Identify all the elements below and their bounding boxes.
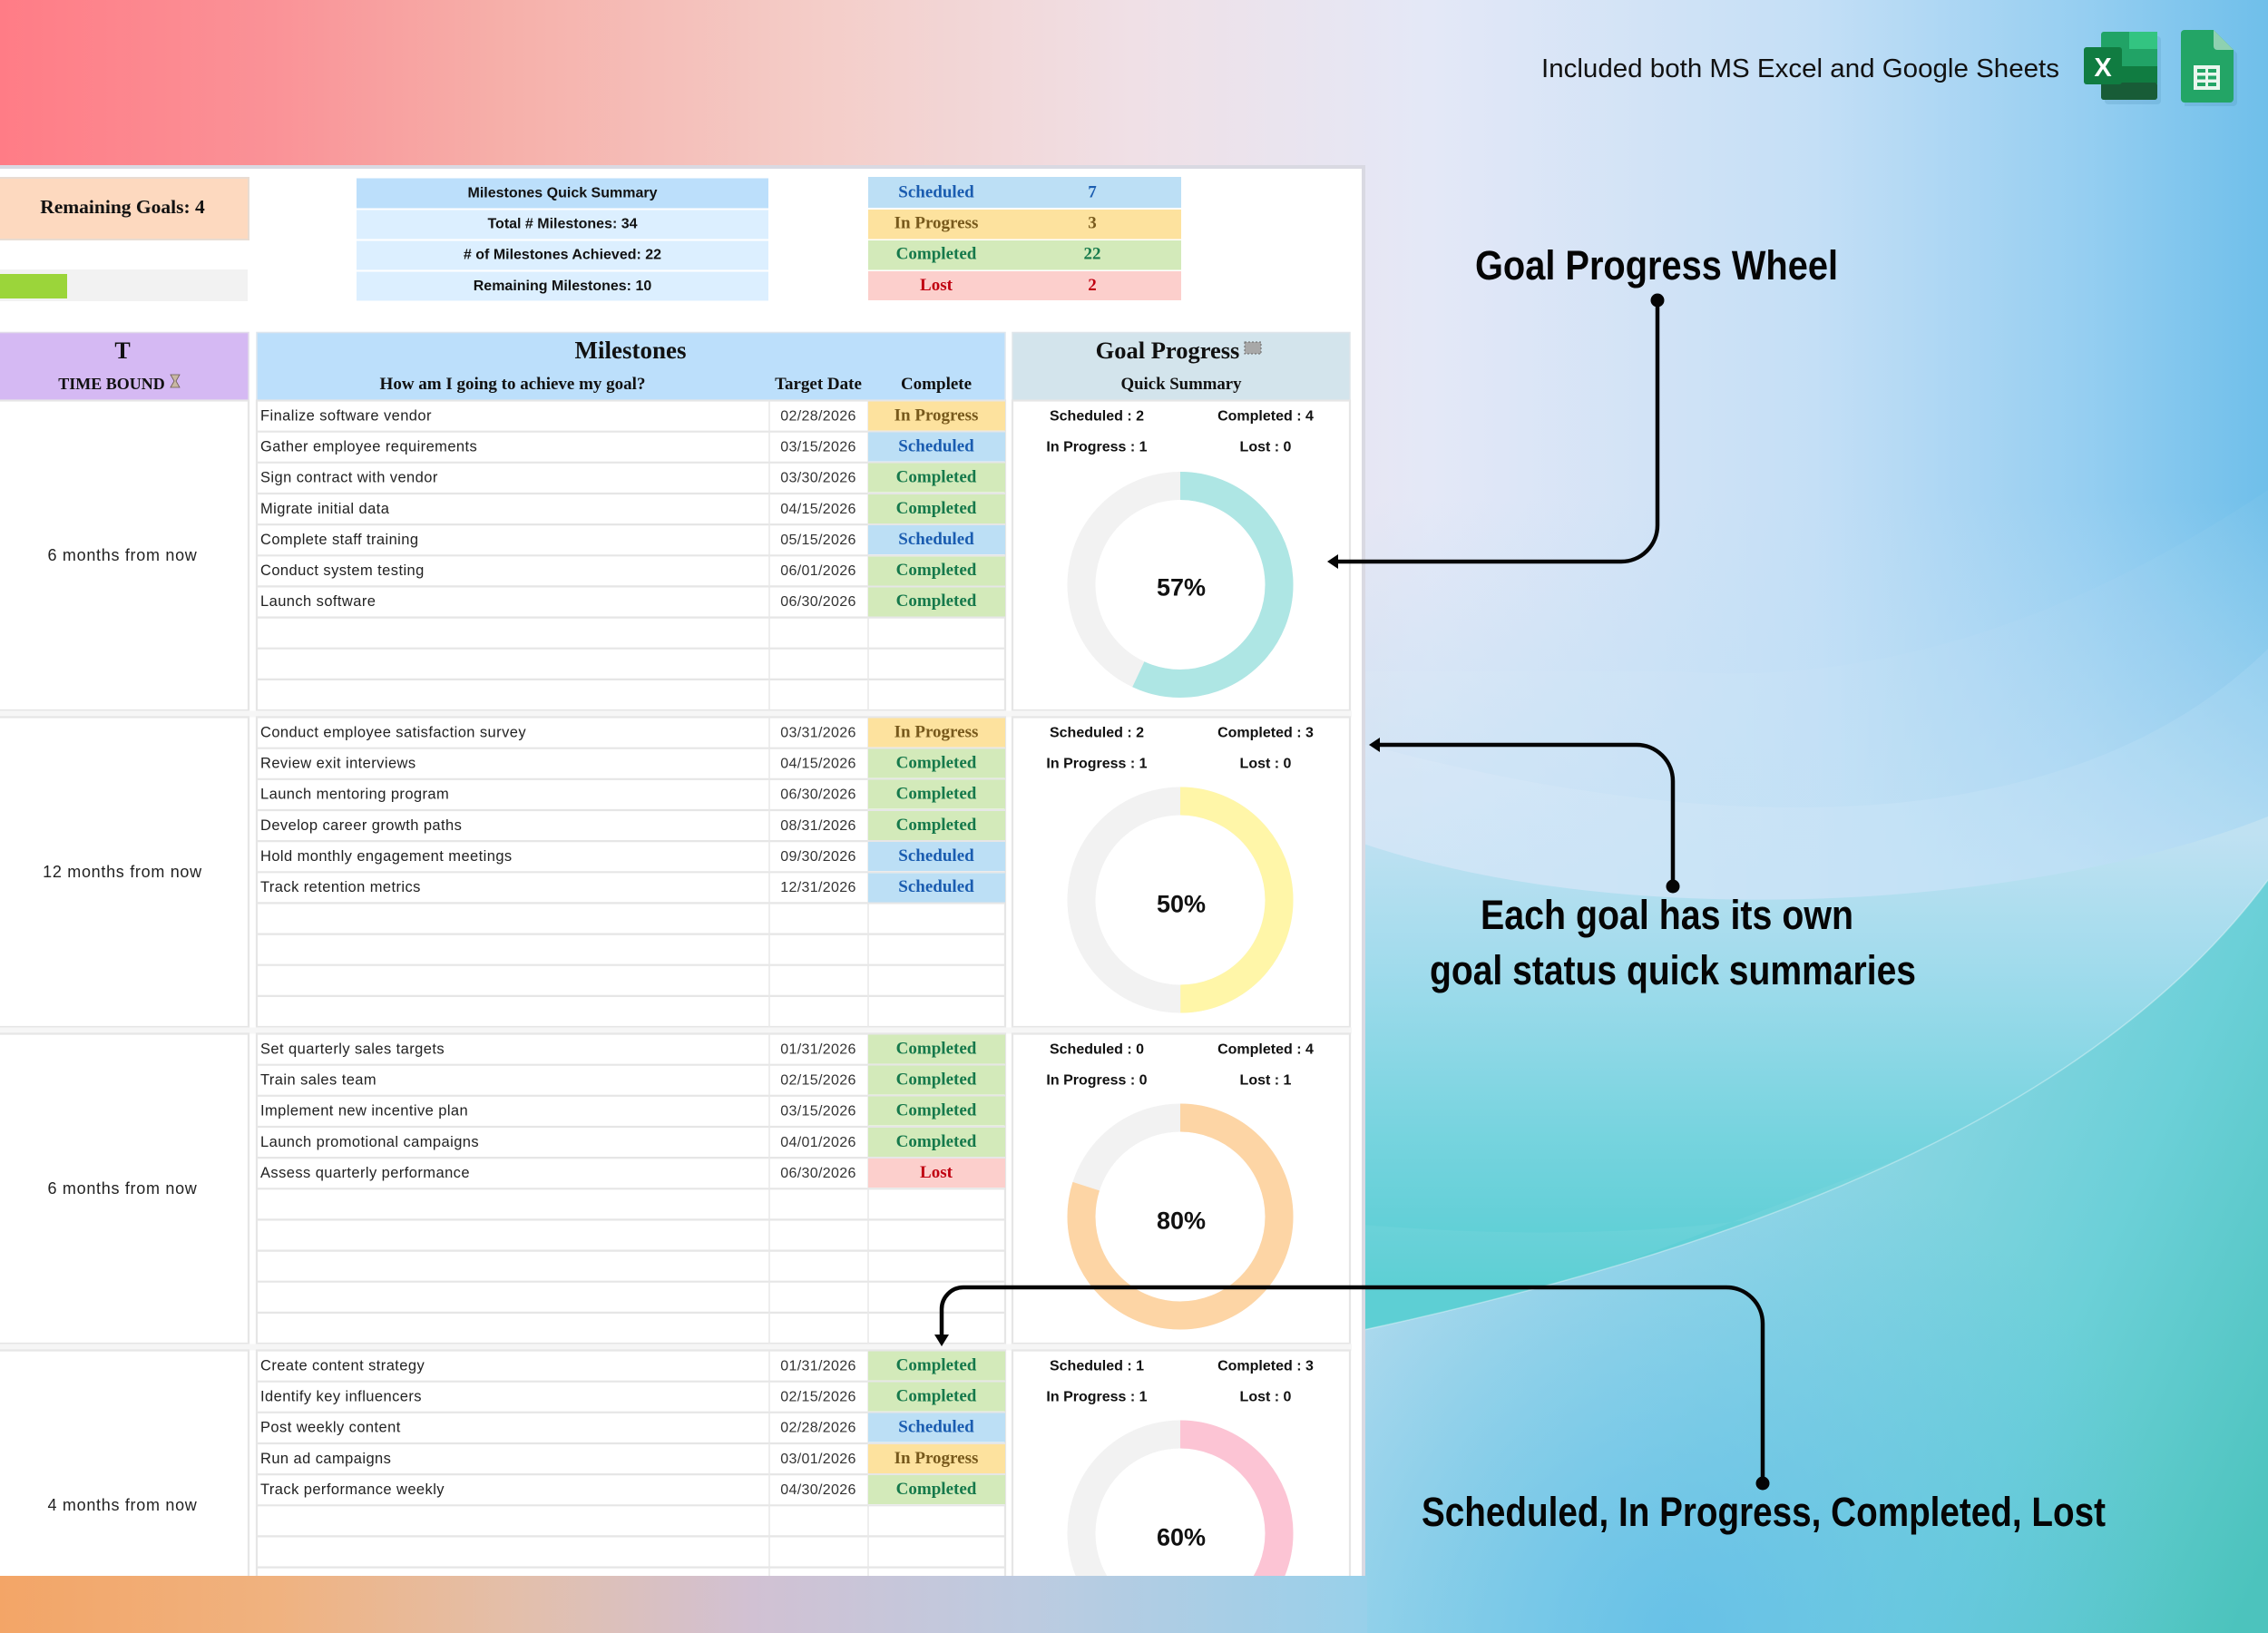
- milestone row: [260, 780, 1005, 809]
- milestone row: [260, 494, 1005, 523]
- goal status summary: Scheduled : 0: [1050, 1041, 1144, 1057]
- milestone row: Review exit interviews: [260, 755, 416, 771]
- milestone row: [260, 1413, 1005, 1442]
- milestone row: Completed: [896, 785, 977, 804]
- milestone row: Train sales team: [260, 1072, 376, 1089]
- milestone row: Completed: [896, 1039, 977, 1058]
- icon: excel: X: [2094, 54, 2112, 83]
- milestone row: Develop career growth paths: [260, 817, 462, 834]
- status totals: Completed: [896, 245, 977, 263]
- milestone row: [260, 432, 1005, 461]
- milestone row: [260, 463, 1005, 492]
- time frame: 12 months from now: [43, 863, 202, 881]
- time frame: 6 months from now: [48, 546, 198, 564]
- milestone row: Completed: [896, 1071, 977, 1089]
- milestone row: 03/30/2026: [780, 471, 856, 486]
- goal status summary: In Progress : 1: [1046, 439, 1148, 455]
- milestone row: Completed: [896, 753, 977, 773]
- milestone row: [260, 401, 1005, 430]
- milestone row: 04/01/2026: [780, 1135, 856, 1150]
- goal status summary: [1046, 1358, 1314, 1404]
- status totals: Scheduled: [898, 183, 974, 201]
- header: goal progress: Goal Progress: [1096, 337, 1239, 364]
- arrow: statuses: [934, 1287, 1769, 1490]
- milestone row: [260, 719, 1005, 748]
- caption: goal progress wheel: Goal Progress Wheel: [1475, 242, 1838, 288]
- milestone row: 03/31/2026: [780, 725, 856, 740]
- milestone row: 04/30/2026: [780, 1482, 856, 1498]
- milestone row: Launch software: [260, 593, 376, 610]
- milestone row: 08/31/2026: [780, 818, 856, 834]
- milestone row: 02/15/2026: [780, 1072, 856, 1089]
- milestone row: 04/15/2026: [780, 757, 856, 771]
- milestone row: Sign contract with vendor: [260, 470, 438, 486]
- milestone row: 06/01/2026: [780, 563, 856, 579]
- progress bar: [0, 269, 248, 301]
- header: goal progress: [1012, 332, 1350, 401]
- icon: google sheets: [2181, 30, 2237, 106]
- milestone row: Identify key influencers: [260, 1388, 422, 1404]
- goal progress wheel 57%: 57%: [1157, 573, 1206, 601]
- goal status summary: Completed : 4: [1217, 408, 1314, 424]
- bottom gradient strip: [0, 1576, 1367, 1633]
- header: milestones: Complete: [901, 375, 972, 394]
- header: milestones: How am I going to achieve my goal?: [380, 375, 645, 394]
- milestone row: Completed: [896, 816, 977, 835]
- milestone row: Launch mentoring program: [260, 787, 449, 803]
- milestone row: Completed: [896, 561, 977, 580]
- icon: hourglass: [171, 375, 180, 387]
- milestone row: Complete staff training: [260, 532, 418, 548]
- goal status summary: [1046, 725, 1314, 771]
- caption: quick summaries: Each goal has its own: [1481, 892, 1853, 938]
- milestones quick summary: Milestones Quick Summary: [468, 185, 658, 201]
- milestone row: Set quarterly sales targets: [260, 1041, 445, 1057]
- header: milestones: Target Date: [775, 375, 862, 394]
- icon: excel: [2084, 32, 2161, 104]
- milestones quick summary: Remaining Milestones: 10: [474, 279, 651, 294]
- goal progress wheel 60%: [1081, 1434, 1279, 1632]
- milestone row: Post weekly content: [260, 1420, 401, 1436]
- caption: quick summaries: goal status quick summaries: [1430, 947, 1916, 993]
- milestone row: Assess quarterly performance: [260, 1165, 470, 1181]
- status totals: Lost: [920, 276, 953, 295]
- time frame: 4 months from now: [48, 1496, 198, 1514]
- milestone row: [260, 842, 1005, 871]
- arrow: quick summaries: [1369, 738, 1680, 893]
- goal progress wheel 80%: 80%: [1157, 1207, 1206, 1234]
- milestone row: Gather employee requirements: [260, 439, 477, 455]
- time frame: 6 months from now: [48, 1179, 198, 1198]
- milestone row: Scheduled: [898, 1418, 974, 1437]
- milestone row: Hold monthly engagement meetings: [260, 848, 513, 865]
- milestone row: [260, 1444, 1005, 1473]
- header: time bound: T: [114, 337, 131, 364]
- caption: quick summaries: [1430, 892, 1916, 993]
- goal block 3: [0, 1027, 1352, 1344]
- milestone row: Lost: [920, 1163, 953, 1182]
- goal status summary: In Progress : 0: [1046, 1072, 1148, 1089]
- milestone row: Track retention metrics: [260, 879, 421, 895]
- header: milestones: [257, 332, 1005, 401]
- goal progress wheel 50%: [1081, 801, 1279, 999]
- milestone row: 02/28/2026: [780, 408, 856, 424]
- milestone row: Conduct employee satisfaction survey: [260, 724, 526, 740]
- milestone row: 12/31/2026: [780, 880, 856, 895]
- milestone row: [260, 811, 1005, 840]
- milestone row: [260, 525, 1005, 554]
- milestone row: Completed: [896, 592, 977, 611]
- goal status summary: Lost : 0: [1240, 439, 1292, 455]
- milestone row: 01/31/2026: [780, 1358, 856, 1374]
- milestone row: Run ad campaigns: [260, 1451, 391, 1467]
- milestone row: 06/30/2026: [780, 787, 856, 803]
- milestone row: Completed: [896, 1132, 977, 1151]
- milestone row: 02/15/2026: [780, 1390, 856, 1404]
- milestone row: [260, 1383, 1005, 1412]
- goal block 4: [0, 1345, 1352, 1633]
- milestone row: Create content strategy: [260, 1357, 425, 1374]
- milestone row: In Progress: [894, 406, 978, 425]
- milestone row: [260, 873, 1005, 902]
- goal progress wheel 60%: 60%: [1157, 1524, 1206, 1551]
- milestone row: Scheduled: [898, 877, 974, 896]
- goal block 1: [0, 401, 1350, 710]
- milestone row: Completed: [896, 1101, 977, 1120]
- header: time bound: [0, 332, 249, 401]
- goal status summary: Completed : 3: [1217, 1358, 1314, 1374]
- milestone row: 05/15/2026: [780, 533, 856, 548]
- goal status summary: Lost : 0: [1240, 1390, 1292, 1404]
- milestone row: Completed: [896, 499, 977, 518]
- milestone row: [260, 1475, 1005, 1504]
- milestone row: Launch promotional campaigns: [260, 1134, 479, 1150]
- status totals: 3: [1088, 214, 1097, 232]
- goal status summary: Lost : 0: [1240, 757, 1292, 771]
- milestone row: [260, 1159, 1005, 1188]
- header: goal progress: Quick Summary: [1120, 375, 1242, 394]
- included formats note: Included both MS Excel and Google Sheets: [1541, 54, 2059, 83]
- remaining goals box: [0, 178, 249, 240]
- milestone row: Conduct system testing: [260, 562, 425, 579]
- milestone row: Scheduled: [898, 437, 974, 455]
- milestones quick summary: [357, 178, 768, 301]
- milestone row: 03/15/2026: [780, 439, 856, 455]
- header: time bound: TIME BOUND: [58, 375, 165, 393]
- milestones quick summary: Total # Milestones: 34: [487, 216, 638, 232]
- milestone row: [260, 557, 1005, 586]
- header: milestones: Milestones: [575, 337, 686, 364]
- goal progress wheel 57%: [1081, 486, 1279, 684]
- status totals: 2: [1088, 276, 1097, 295]
- milestone row: Scheduled: [898, 530, 974, 549]
- milestone row: [260, 1128, 1005, 1157]
- milestone row: [260, 588, 1005, 617]
- milestone row: Implement new incentive plan: [260, 1103, 468, 1120]
- goal status summary: Completed : 3: [1217, 725, 1314, 740]
- goal progress wheel 80%: [1081, 1118, 1279, 1315]
- milestone row: Completed: [896, 468, 977, 487]
- goal status summary: Scheduled : 1: [1050, 1358, 1144, 1374]
- milestone row: [260, 1096, 1005, 1125]
- goal progress wheel 50%: 50%: [1157, 891, 1206, 918]
- milestone row: 06/30/2026: [780, 1166, 856, 1181]
- status totals: 22: [1083, 245, 1101, 263]
- goal status summary: [1046, 1041, 1314, 1089]
- goal block 2: [0, 711, 1352, 1027]
- milestone row: In Progress: [894, 722, 978, 741]
- caption: statuses: Scheduled, In Progress, Completed, Lost: [1422, 1489, 2106, 1535]
- milestone row: 03/15/2026: [780, 1104, 856, 1120]
- milestone row: 09/30/2026: [780, 849, 856, 865]
- goal status summary: Completed : 4: [1217, 1041, 1314, 1057]
- goal status summary: Scheduled : 2: [1050, 725, 1144, 740]
- milestone row: Track performance weekly: [260, 1481, 445, 1498]
- milestone row: 04/15/2026: [780, 502, 856, 517]
- milestone row: [260, 1034, 1005, 1063]
- milestone row: [260, 1065, 1005, 1094]
- milestone row: Scheduled: [898, 846, 974, 865]
- milestone row: Migrate initial data: [260, 501, 390, 517]
- goal status summary: Scheduled : 2: [1050, 408, 1144, 424]
- goal status summary: In Progress : 1: [1046, 757, 1148, 771]
- milestone row: Finalize software vendor: [260, 407, 432, 424]
- milestone row: 06/30/2026: [780, 594, 856, 610]
- milestone row: 01/31/2026: [780, 1041, 856, 1057]
- milestone row: Completed: [896, 1480, 977, 1499]
- spreadsheet panel: [0, 167, 1364, 1633]
- status totals: In Progress: [894, 214, 978, 232]
- milestones quick summary: # of Milestones Achieved: 22: [464, 247, 661, 263]
- goal status summary: Lost : 1: [1240, 1072, 1292, 1089]
- arrow: goal progress wheel: [1327, 294, 1664, 569]
- milestone row: 03/01/2026: [780, 1452, 856, 1467]
- status totals: 7: [1088, 183, 1097, 201]
- milestone row: [260, 1352, 1005, 1381]
- milestone row: 02/28/2026: [780, 1421, 856, 1436]
- milestone row: Completed: [896, 1355, 977, 1374]
- goal status summary: [1046, 408, 1314, 455]
- milestone row: In Progress: [894, 1449, 978, 1468]
- status totals: [868, 177, 1181, 300]
- icon: checkered flag: [1245, 342, 1261, 354]
- milestone row: Completed: [896, 1386, 977, 1406]
- milestone row: [260, 749, 1005, 778]
- goal status summary: In Progress : 1: [1046, 1390, 1148, 1404]
- remaining goals box: Remaining Goals: 4: [40, 196, 205, 218]
